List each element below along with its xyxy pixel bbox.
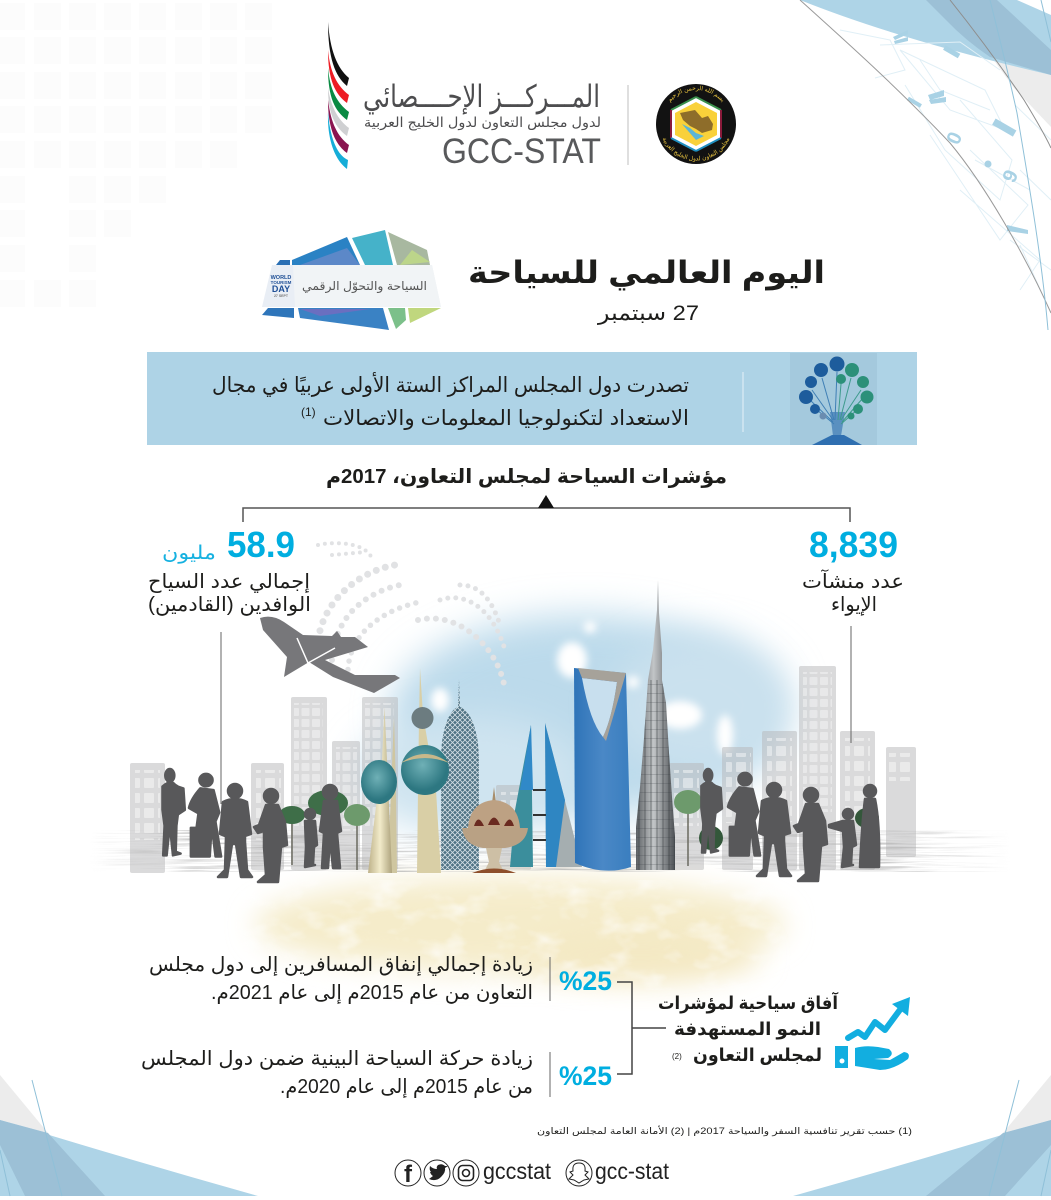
footnote marker 1: (1) [301, 405, 316, 419]
tourists value: 58.9 [227, 524, 295, 565]
title: اليوم العالمي للسياحة [468, 255, 825, 291]
World Tourism Day wordmark: TOURISM [271, 280, 292, 285]
World Tourism Day wordmark: DAY [272, 284, 290, 294]
GCC emblem: بسم الله الرحمن الرحيم [670, 86, 724, 103]
icon: growth arrow over hand [835, 997, 910, 1070]
section heading [658, 991, 839, 1066]
heading bracket [243, 495, 850, 522]
bottom-left corner decoration [0, 1075, 258, 1196]
top-right corner decoration: 0 [943, 129, 967, 148]
icon: facebook: f [404, 1161, 413, 1188]
stat: accommodation [802, 524, 904, 616]
World Tourism Day wordmark: WORLD [271, 275, 291, 281]
accommodation label line 2: الإيواء [831, 594, 877, 616]
target 1 text [149, 954, 533, 1005]
target 2 value: %25 [559, 1061, 612, 1091]
sky cloud [355, 615, 790, 835]
people silhouettes right [701, 769, 879, 881]
GCC emblem [656, 84, 736, 164]
leader line left [220, 632, 222, 804]
social media bar [395, 1158, 670, 1188]
World Tourism Day logo [262, 230, 441, 330]
top-right corner decoration [800, 0, 1051, 330]
stat: tourists [148, 524, 311, 616]
banner line 2: الاستعداد لتكنولوجيا المعلومات والاتصالات [323, 407, 689, 430]
grass streaks [90, 830, 1010, 872]
Bahrain WTC [510, 723, 582, 867]
date: 27 سبتمبر [597, 302, 699, 325]
GCC emblem: مجلس التعاون لدول الخليج العربية [663, 138, 730, 162]
Burj Khalifa [636, 580, 675, 870]
logo Arabic subtitle: لدول مجلس التعاون لدول الخليج العربية [364, 115, 601, 131]
logo ribbon [328, 22, 349, 169]
growth targets section [141, 954, 910, 1099]
icon: snapchat [566, 1160, 592, 1186]
indicators heading: مؤشرات السياحة لمجلس التعاون، 2017م [326, 466, 727, 488]
background pixel squares [0, 3, 272, 307]
top-right corner decoration: 9 [999, 167, 1023, 186]
logo Arabic name: المـــركـــز الإحــــصائي [363, 79, 600, 115]
halftone dots [318, 543, 505, 690]
airplane icon [260, 617, 400, 693]
icon: instagram [453, 1160, 479, 1186]
section heading: آفاق سياحية لمؤشرات [658, 991, 839, 1014]
handle gccstat: gccstat [483, 1158, 552, 1184]
palm trees [279, 790, 879, 870]
target 2 text: من عام 2015م إلى عام 2020م. [280, 1076, 533, 1099]
Kingdom Centre [574, 668, 631, 871]
tourists unit: مليون [162, 543, 216, 564]
banner [147, 352, 917, 445]
icon: technology tree [799, 356, 874, 445]
leader line right [850, 626, 852, 743]
target 1 value: %25 [559, 966, 612, 996]
Kuwait Towers [361, 668, 449, 873]
footnotes: (1) حسب تقرير تنافسية السفر والسياحة 2017م | (2) الأمانة العامة لمجلس التعاون [537, 1125, 912, 1136]
target 1 text: زيادة إجمالي إنفاق المسافرين إلى دول مجلس [149, 954, 533, 977]
logo GCC-STAT wordmark: GCC-STAT [442, 132, 601, 171]
skyline illustration [90, 543, 1010, 990]
accommodation label line 1: عدد منشآت [802, 568, 904, 593]
accommodation value: 8,839 [809, 524, 898, 565]
handle gcc-stat: gcc-stat [595, 1158, 670, 1184]
tourists label line 1: إجمالي عدد السياح [148, 571, 310, 594]
target 2 text: زيادة حركة السياحة البينية ضمن دول المجلس [141, 1048, 533, 1070]
logo band caption: السياحة والتحوّل الرقمي [302, 279, 427, 294]
section heading: النمو المستهدفة [674, 1019, 821, 1040]
Doha tower [441, 679, 479, 870]
gray buildings [130, 666, 916, 873]
GCC-STAT logo [328, 22, 628, 171]
World Tourism Day wordmark: 27 SEPT [274, 294, 289, 298]
icon: facebook [395, 1160, 421, 1188]
section heading: لمجلس التعاون [693, 1045, 822, 1066]
sand ground [240, 877, 800, 990]
target 1 text: التعاون من عام 2015م إلى عام 2021م. [211, 982, 533, 1005]
target 2 text [141, 1048, 533, 1099]
bottom-right corner decoration [793, 1075, 1051, 1196]
tourists label line 2: الوافدين (القادمين) [148, 594, 311, 616]
people silhouettes left [162, 769, 341, 882]
section heading: (2) [672, 1052, 682, 1061]
banner line 1: تصدرت دول المجلس المراكز الستة الأولى عربيًا في مجال [212, 372, 689, 397]
incense burner [462, 787, 528, 873]
icon: twitter [424, 1160, 450, 1186]
World Tourism Day wordmark [271, 275, 292, 298]
connector bracket [617, 982, 666, 1074]
